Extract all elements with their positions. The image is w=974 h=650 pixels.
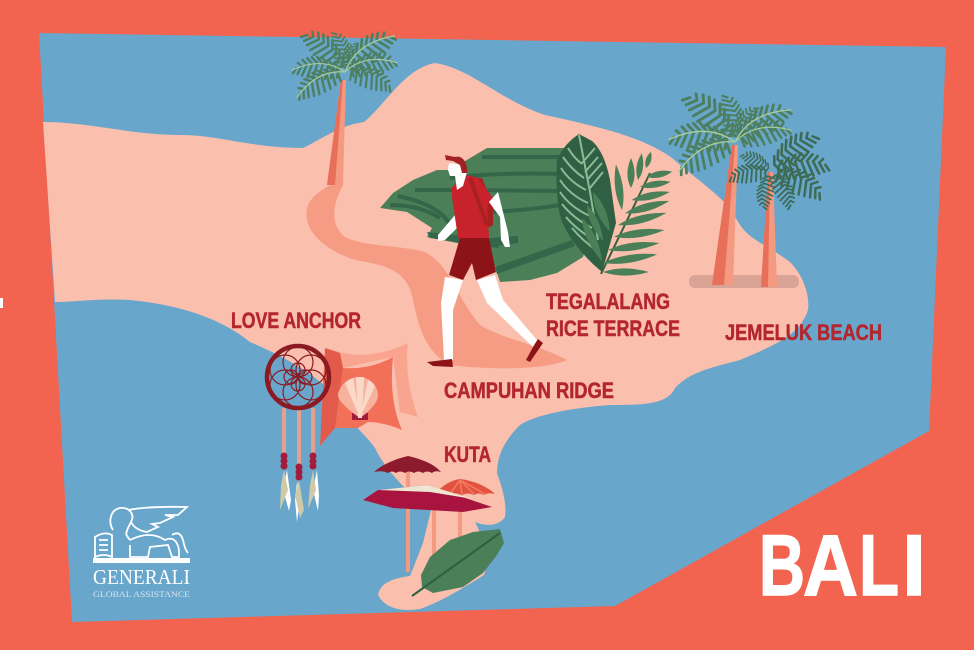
title: I [902,518,926,614]
lion emblem [95,507,188,557]
umbrella: orange [434,479,495,538]
palm tree: beach short [727,124,830,287]
title [759,518,926,614]
umbrella: large crimson [363,485,492,557]
shoes [427,359,453,367]
title: B [759,518,805,614]
rice terrace [380,148,590,282]
road [306,185,567,368]
banana leaf [412,529,504,596]
head [448,163,467,190]
shorts [449,238,496,280]
legs [441,277,463,360]
pillow [320,343,418,446]
fern leaf [578,151,673,276]
label: tegalalang rice terrace: TEGALALANG [546,289,670,314]
base bar [93,558,190,563]
shirt [452,175,493,238]
logo: generali [93,507,190,599]
shell [338,377,378,420]
arm [489,192,510,247]
wordmark: GENERALI [93,565,190,589]
big striped leaf [557,134,616,272]
palm tree: north [291,23,399,185]
label: tegalalang rice terrace [546,289,680,341]
tagline: GLOBAL ASSISTANCE [93,590,190,599]
hiker [427,155,543,367]
palm tree: beach tall [669,84,794,285]
hair and cap [445,155,467,173]
island land [43,63,808,610]
label: campuhan ridge: CAMPUHAN RIDGE [444,378,614,403]
label: kuta: KUTA [444,442,491,467]
label: love anchor: LOVE ANCHOR [231,308,361,333]
title: A [803,518,858,614]
back arm [438,215,458,241]
dream catcher [267,346,329,522]
backpack [470,178,493,228]
label: tegalalang rice terrace: RICE TERRACE [546,316,680,341]
label: jemeluk beach: JEMELUK BEACH [725,320,882,345]
umbrella: dark red [374,456,441,572]
shadow under palms [689,275,799,288]
title: L [859,518,899,614]
